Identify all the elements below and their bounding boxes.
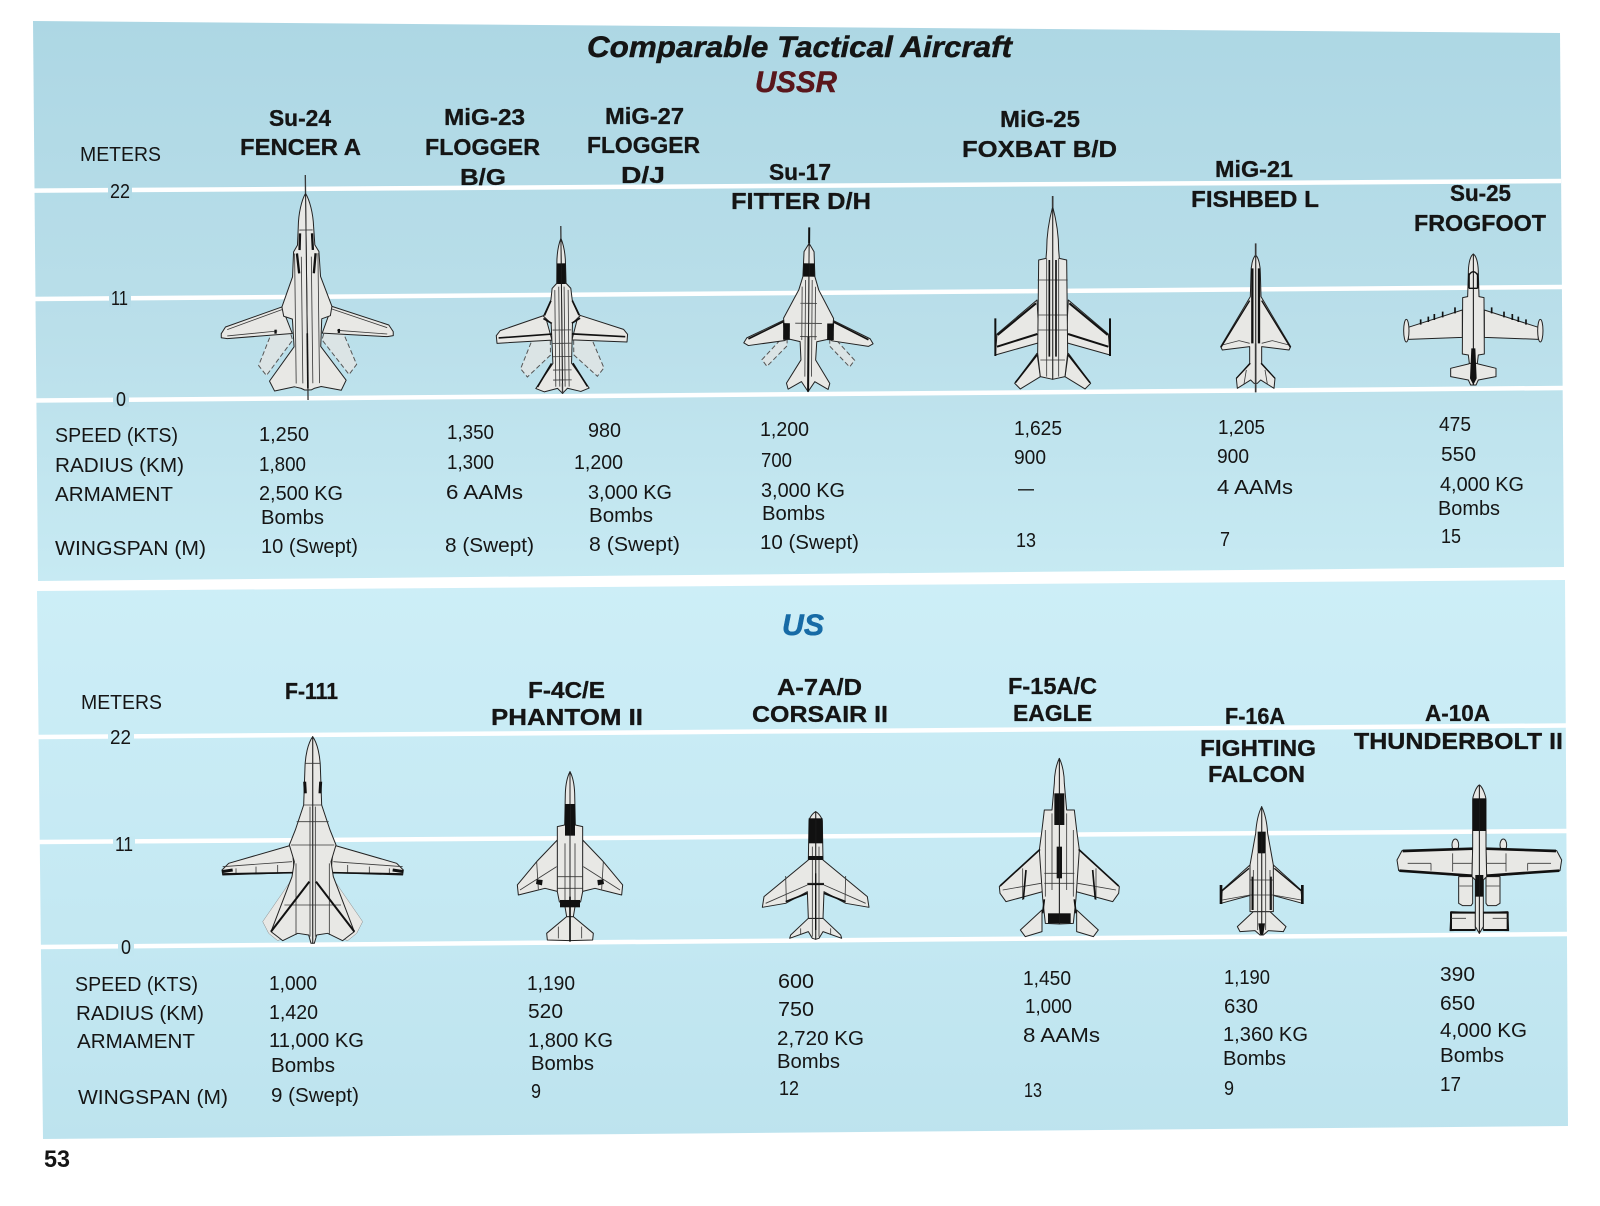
name: Su-17 Fitter D/H: FITTER D/H [731, 188, 871, 214]
name: MiG-23 Flogger B/G: B/G [460, 164, 506, 190]
name: Su-17 Fitter D/H: Su-17 [769, 159, 831, 185]
stats: F-4C/E: 9 [531, 1080, 541, 1103]
stats: MiG-23: 1,300 [447, 451, 494, 474]
stats: Su-17: 700 [761, 449, 792, 472]
name: A-10A Thunderbolt II: A-10A [1425, 700, 1490, 726]
stats: A-10A: Bombs [1440, 1044, 1504, 1067]
stats: Su-25: Bombs [1438, 497, 1500, 520]
name: MiG-27 Flogger D/J: D/J [621, 162, 665, 188]
icon: F-16 planform [1221, 807, 1302, 935]
name: F-4C/E Phantom II [491, 677, 643, 730]
axis labels: meters [81, 691, 162, 959]
name: MiG-25 Foxbat B/D [962, 106, 1117, 162]
name: Su-25 Frogfoot: Su-25 [1450, 180, 1511, 206]
stats: Su-24: 1,800 [259, 453, 306, 476]
stats: MiG-25: 1,625 [1014, 417, 1062, 440]
name: A-10A Thunderbolt II: THUNDERBOLT II [1354, 728, 1563, 754]
name: Su-24 Fencer A: FENCER A [240, 134, 361, 160]
stats: F-16A: Bombs [1223, 1047, 1286, 1070]
stats: MiG-27: 1,200 [574, 451, 623, 474]
name: MiG-25 Foxbat B/D: FOXBAT B/D [962, 136, 1117, 162]
row labels: WINGSPAN (M) [78, 1086, 228, 1109]
name: F-15A/C Eagle: F-15A/C [1008, 673, 1097, 699]
name: F-111: F-111 [285, 678, 338, 704]
stats: MiG-25: 900 [1014, 446, 1046, 469]
stats: F-15A/C: 1,000 [1025, 995, 1072, 1018]
row labels: SPEED (KTS) [55, 424, 178, 447]
stats: Su-17 [760, 418, 859, 554]
icon: F-111 planform [222, 737, 403, 943]
stats: MiG-27: 8 (Swept) [589, 533, 680, 556]
heading: US: US [782, 609, 824, 642]
stats: F-15A/C: 1,450 [1023, 967, 1071, 990]
axis labels: meters: 11 [115, 833, 133, 856]
stats: F-111: 11,000 KG [269, 1029, 364, 1052]
stats: MiG-23: 6 AAMs [446, 481, 523, 504]
stats: Su-25: 475 [1439, 413, 1471, 436]
icon: Su-24 planform [219, 174, 394, 401]
stats: Su-24 [259, 423, 358, 558]
name: MiG-21 Fishbed L: FISHBED L [1191, 186, 1319, 212]
axis labels: meters: 0 [121, 936, 131, 959]
name: F-16A Fighting Falcon [1200, 703, 1316, 787]
stats: MiG-21: 4 AAMs [1217, 476, 1293, 499]
axis labels: meters: 22 [110, 726, 131, 749]
aircraft column: Su-17 [731, 159, 874, 554]
aircraft column: F-4C/E [491, 677, 643, 1103]
stats: F-15A/C: 8 AAMs [1023, 1024, 1100, 1047]
aircraft column: MiG-23 [425, 104, 628, 557]
stats: Su-24: 1,250 [259, 423, 309, 446]
stats: A-7A/D: 600 [778, 970, 814, 993]
stats: F-4C/E: 1,800 KG [528, 1029, 613, 1052]
row labels: WINGSPAN (M) [55, 537, 206, 560]
stats: MiG-25 [1014, 417, 1062, 552]
aircraft column: A-7A/D [752, 674, 888, 1100]
stats: MiG-23: 1,350 [447, 421, 494, 444]
stats: F-111: 9 (Swept) [271, 1084, 359, 1107]
stats: A-10A: 4,000 KG [1440, 1019, 1527, 1042]
stats: MiG-27: Bombs [589, 504, 653, 527]
stats: F-4C/E: 1,190 [527, 972, 575, 995]
aircraft column: Su-25 [1404, 180, 1546, 548]
stats: MiG-21: 1,205 [1218, 416, 1265, 439]
name: MiG-21 Fishbed L: MiG-21 [1215, 156, 1293, 182]
aircraft column: MiG-27 [574, 103, 700, 556]
row labels: SPEED (KTS) [75, 973, 198, 996]
stats: A-7A/D [777, 970, 864, 1100]
stats: MiG-23 [445, 421, 534, 557]
panel: US aircraft [37, 580, 1568, 1139]
stats: F-15A/C: 13 [1024, 1079, 1042, 1102]
name: F-16A Fighting Falcon: FALCON [1208, 761, 1305, 787]
stats: MiG-21: 900 [1217, 445, 1249, 468]
stats: A-10A: 17 [1440, 1073, 1461, 1096]
name: F-16A Fighting Falcon: FIGHTING [1200, 735, 1316, 761]
name: F-15A/C Eagle: EAGLE [1013, 700, 1092, 726]
name: F-15A/C Eagle [1008, 673, 1097, 726]
name: F-16A Fighting Falcon: F-16A [1225, 703, 1285, 729]
stats: A-7A/D: Bombs [777, 1050, 840, 1073]
stats: F-16A: 1,360 KG [1223, 1023, 1308, 1046]
stats: F-111 [269, 972, 364, 1107]
stats: Su-17: Bombs [762, 502, 825, 525]
stats: A-7A/D: 2,720 KG [777, 1027, 864, 1050]
icon: MiG-25 planform [995, 196, 1110, 389]
title: Comparable Tactical Aircraft [587, 31, 1014, 64]
stats: Su-25: 4,000 KG [1440, 473, 1524, 496]
name: Su-24 Fencer A [240, 105, 361, 160]
stats: A-7A/D: 750 [778, 998, 814, 1021]
stats: A-10A [1440, 963, 1527, 1096]
page number: 53 [44, 1146, 70, 1173]
aircraft column: MiG-25 [962, 106, 1117, 552]
row labels [75, 973, 228, 1109]
stats: F-4C/E: Bombs [531, 1052, 594, 1075]
aircraft column: F-111 [222, 678, 403, 1107]
axis labels: meters [80, 143, 161, 411]
row labels: ARMAMENT [55, 483, 173, 506]
stats: MiG-27: 3,000 KG [588, 481, 672, 504]
name: F-4C/E Phantom II: F-4C/E [528, 677, 605, 703]
axis labels: meters: METERS [80, 143, 161, 166]
stats: Su-17: 3,000 KG [761, 479, 845, 502]
name: MiG-27 Flogger D/J: MiG-27 [605, 103, 684, 129]
stats: F-4C/E: 520 [528, 1000, 563, 1023]
panel: USSR aircraft [33, 21, 1564, 581]
stats: MiG-25: — [1018, 477, 1034, 500]
stats: F-15A/C [1023, 967, 1100, 1102]
name: Su-24 Fencer A: Su-24 [269, 105, 331, 131]
name: MiG-23 Flogger B/G [425, 104, 540, 190]
icon: Su-25 planform [1404, 254, 1543, 385]
aircraft column: F-16A [1200, 703, 1316, 1100]
name: MiG-27 Flogger D/J: FLOGGER [587, 132, 700, 158]
icon: F-4 planform [517, 772, 623, 942]
stats: A-10A: 650 [1440, 992, 1475, 1015]
US panel background [37, 580, 1568, 1139]
name: A-7A/D Corsair II: A-7A/D [777, 674, 862, 700]
stats: Su-17: 1,200 [760, 418, 809, 441]
icon: MiG-23 planform [495, 225, 628, 395]
axis labels: meters: 0 [116, 388, 126, 411]
stats: MiG-25: 13 [1016, 529, 1036, 552]
stats: F-4C/E [527, 972, 613, 1103]
icon: A-7 planform [762, 812, 869, 939]
row labels [55, 424, 206, 560]
name: Su-25 Frogfoot [1414, 180, 1546, 236]
stats: F-16A: 1,190 [1224, 966, 1270, 989]
axis labels: meters: 22 [110, 180, 130, 203]
stats: MiG-27 [574, 419, 680, 556]
stats: MiG-23: 8 (Swept) [445, 534, 534, 557]
row labels: ARMAMENT [77, 1030, 195, 1053]
name: A-7A/D Corsair II [752, 674, 888, 727]
name: MiG-21 Fishbed L [1191, 156, 1319, 212]
stats: F-111: Bombs [271, 1054, 335, 1077]
icon: MiG-21 planform [1221, 243, 1291, 392]
stats: F-111: 1,000 [269, 972, 317, 995]
name: Su-17 Fitter D/H [731, 159, 871, 214]
heading: USSR: USSR [755, 66, 837, 99]
stats: Su-25: 15 [1441, 525, 1461, 548]
name: A-7A/D Corsair II: CORSAIR II [752, 701, 888, 727]
name: MiG-23 Flogger B/G: MiG-23 [444, 104, 525, 130]
USSR panel background [33, 21, 1564, 581]
row labels: RADIUS (KM) [76, 1002, 204, 1025]
stats: Su-25 [1438, 413, 1524, 548]
stats: Su-24: 2,500 KG [259, 482, 343, 505]
name: Su-25 Frogfoot: FROGFOOT [1414, 210, 1546, 236]
name: MiG-25 Foxbat B/D: MiG-25 [1000, 106, 1080, 132]
stats: MiG-21 [1217, 416, 1293, 551]
aircraft column: Su-24 [219, 105, 394, 558]
stats: Su-24: Bombs [261, 506, 324, 529]
icon: F-15 planform [999, 758, 1119, 937]
stats: MiG-21: 7 [1220, 528, 1230, 551]
stats: Su-17: 10 (Swept) [760, 531, 859, 554]
icon: A-10 planform [1397, 785, 1562, 933]
axis labels: meters: METERS [81, 691, 162, 714]
stats: Su-25: 550 [1441, 443, 1476, 466]
axis labels: meters: 11 [111, 287, 128, 310]
stats: F-16A: 630 [1224, 995, 1258, 1018]
stats: F-16A: 9 [1224, 1077, 1234, 1100]
stats: MiG-27: 980 [588, 419, 621, 442]
stats: A-7A/D: 12 [779, 1077, 799, 1100]
name: MiG-27 Flogger D/J [587, 103, 700, 188]
stats: A-10A: 390 [1440, 963, 1475, 986]
name: MiG-23 Flogger B/G: FLOGGER [425, 134, 540, 160]
aircraft column: A-10A [1354, 700, 1563, 1096]
icon: Su-17 planform [743, 227, 874, 392]
name: A-10A Thunderbolt II [1354, 700, 1563, 754]
stats: F-16A [1223, 966, 1308, 1100]
stats: F-111: 1,420 [269, 1001, 318, 1024]
aircraft column: F-15A/C [999, 673, 1119, 1102]
row labels: RADIUS (KM) [55, 454, 184, 477]
name: F-4C/E Phantom II: PHANTOM II [491, 704, 643, 730]
aircraft column: MiG-21 [1191, 156, 1319, 551]
stats: Su-24: 10 (Swept) [261, 535, 358, 558]
